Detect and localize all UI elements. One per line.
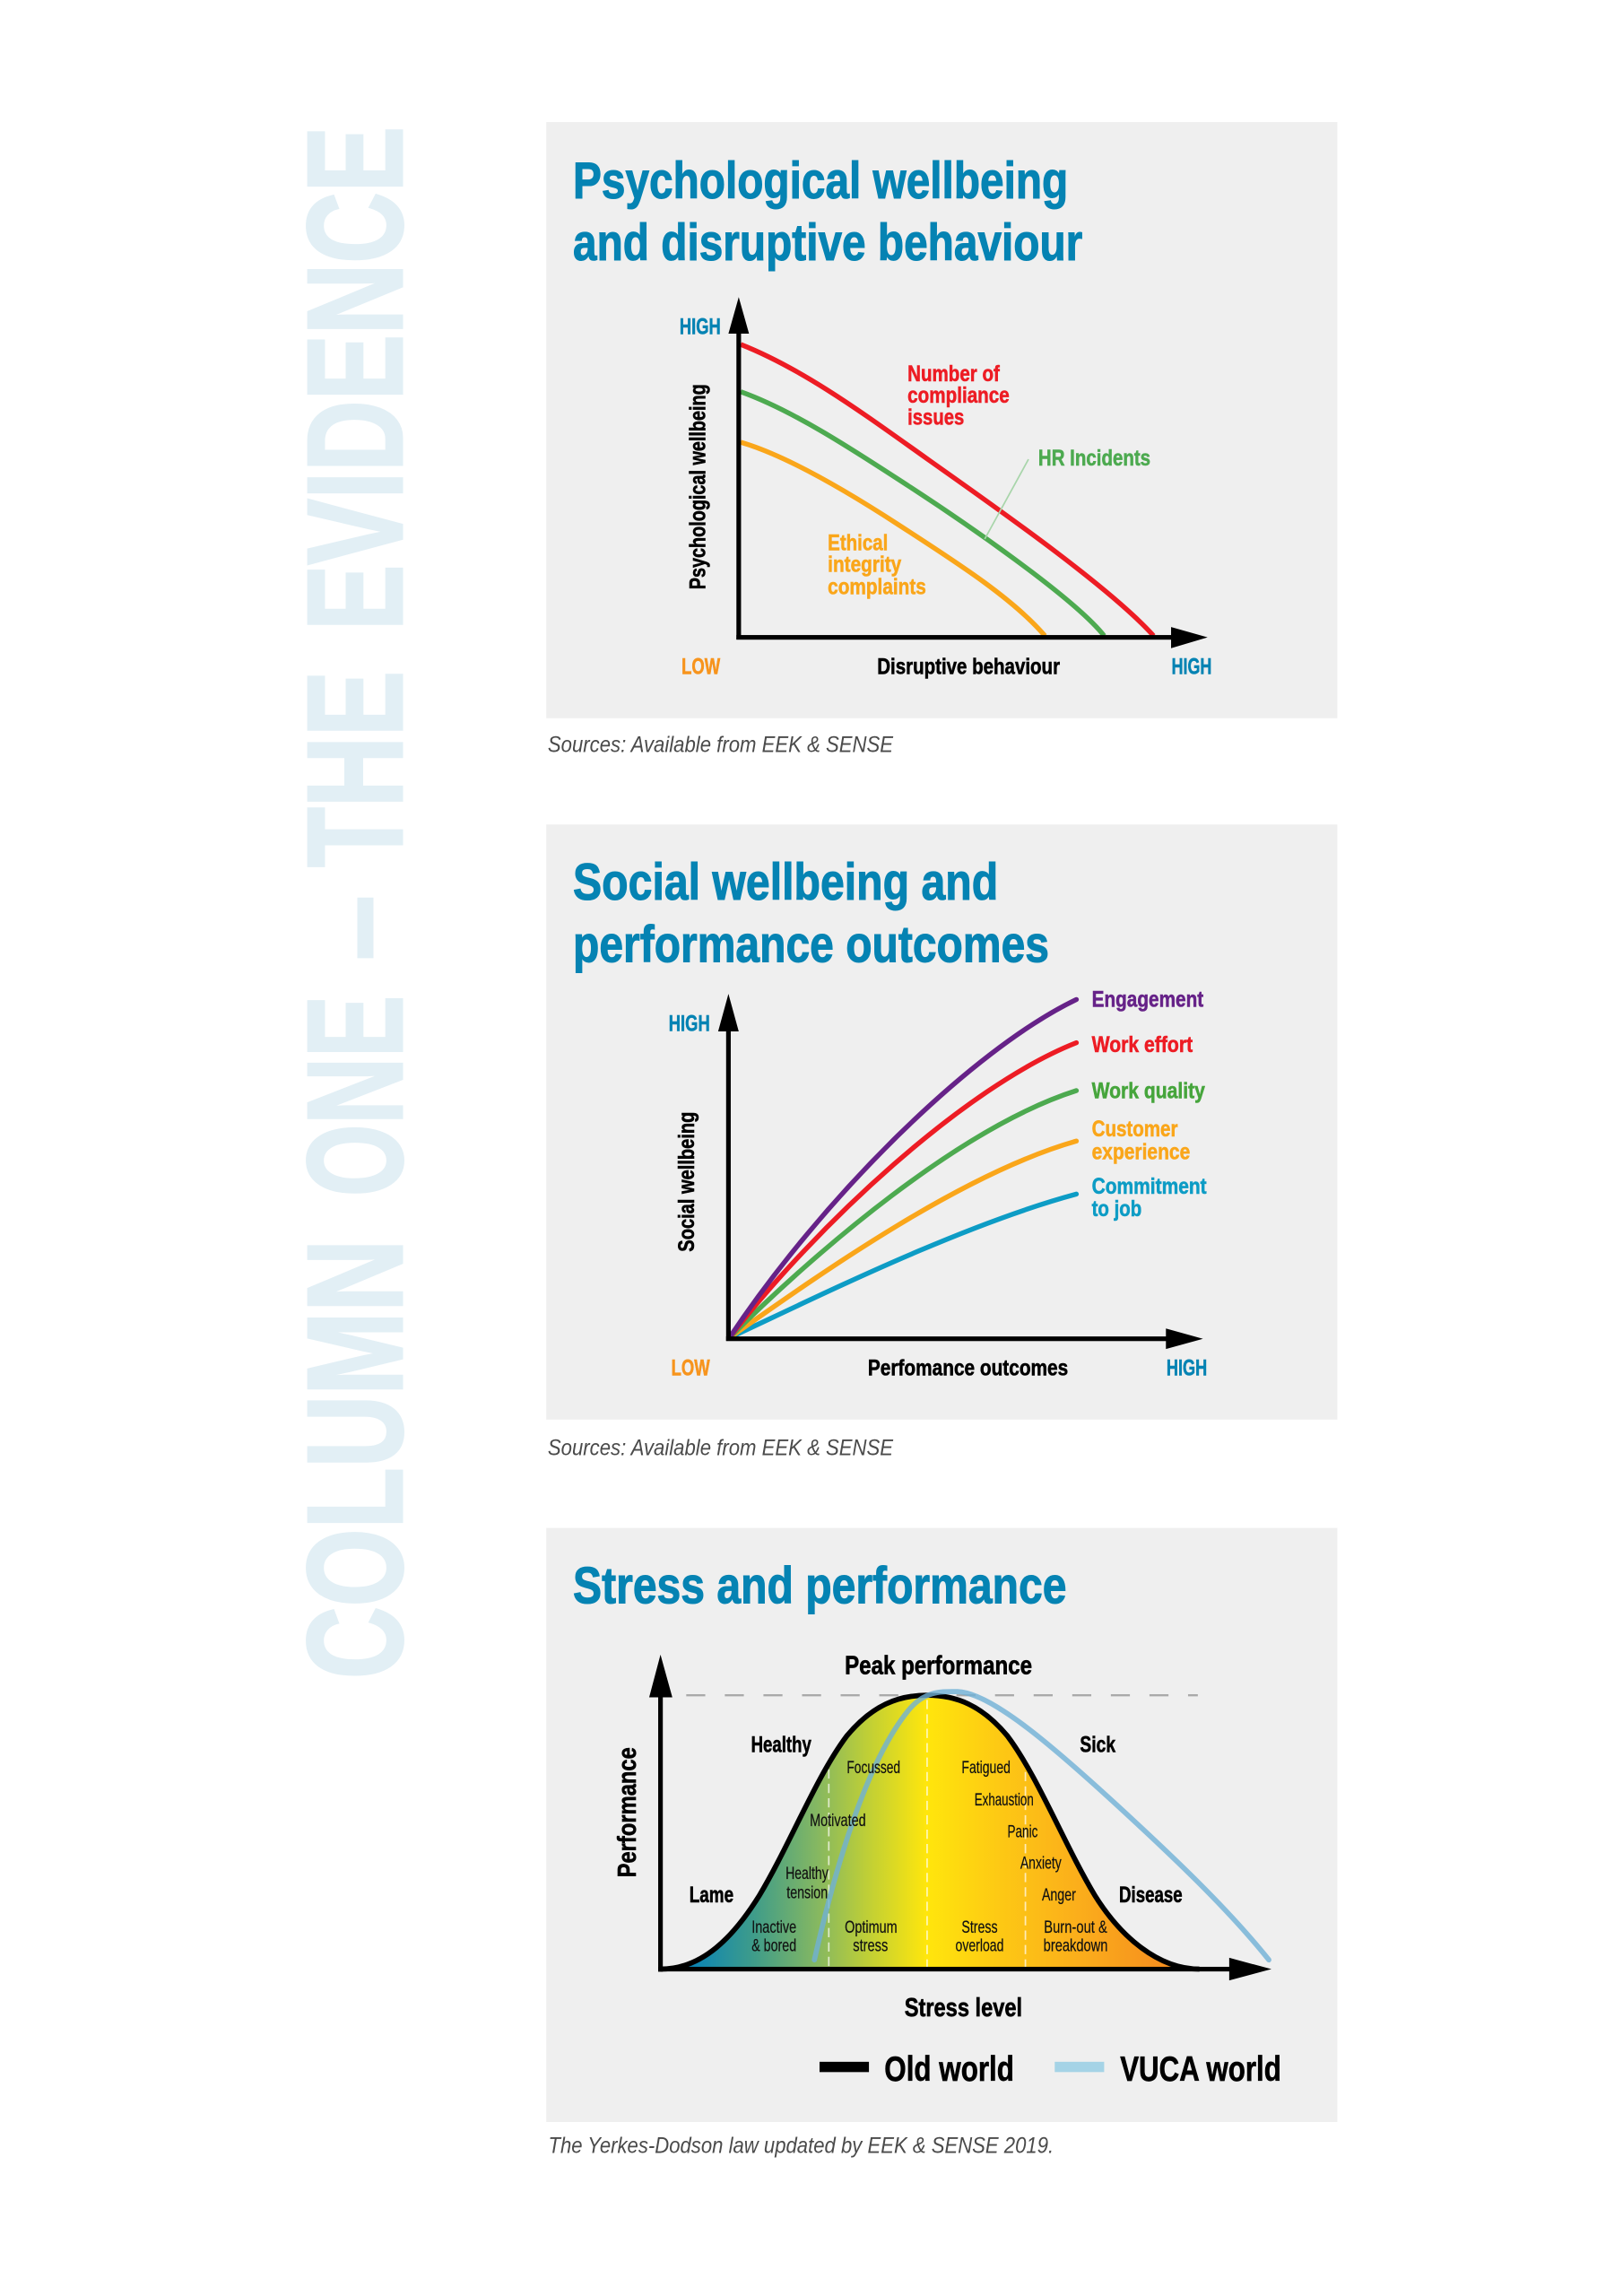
- low label: LOW: [681, 654, 720, 679]
- line chart: wellbeing vs disruptive behaviour: [680, 297, 1211, 679]
- vertical watermark heading: THE: [279, 671, 430, 867]
- zone labels: Sick: [1080, 1732, 1116, 1757]
- stress state labels: Inactive: [751, 1918, 796, 1937]
- stress state labels: Anger: [1042, 1886, 1076, 1905]
- caption: The Yerkes-Dodson law updated by EEK & SENSE 2019.: [548, 2133, 1054, 2158]
- heading: social wellbeing: performance outcomes: [573, 917, 1049, 974]
- low label: LOW: [672, 1355, 710, 1380]
- label: ethical integrity complaints: complaints: [828, 574, 926, 599]
- label: work quality: Work quality: [1092, 1079, 1205, 1104]
- stress state labels: Focussed: [846, 1759, 900, 1778]
- y axis with arrow: [718, 994, 739, 1341]
- legend: VUCA world: [1120, 2050, 1281, 2089]
- stress state labels: overload: [956, 1936, 1003, 1955]
- heading: stress and performance: Stress and performance: [573, 1557, 1066, 1614]
- curve: work quality: [730, 1091, 1076, 1338]
- source note: Sources: Available from EEK & SENSE: [548, 1435, 894, 1460]
- legend: Old world: [884, 2050, 1014, 2089]
- x axis high label: HIGH: [1167, 1355, 1207, 1380]
- curve: HR incidents: [741, 392, 1104, 636]
- stress state labels: Motivated: [810, 1812, 866, 1831]
- heading: social wellbeing: Social wellbeing and: [573, 854, 998, 911]
- label: ethical integrity complaints: Ethical: [828, 531, 888, 556]
- label: compliance issues: issues: [907, 405, 964, 430]
- curve: customer experience: [730, 1141, 1076, 1338]
- stress state labels: stress: [853, 1936, 888, 1955]
- y axis with arrow: [728, 297, 749, 639]
- curve: ethical integrity complaints: [741, 442, 1045, 636]
- stress state labels: Exhaustion: [975, 1791, 1034, 1810]
- y axis high label: HIGH: [680, 315, 721, 340]
- stress state labels: Panic: [1007, 1823, 1037, 1842]
- label: customer experience: Customer: [1092, 1117, 1178, 1142]
- stress state labels: Anxiety: [1020, 1855, 1062, 1874]
- label: compliance issues: [907, 361, 1010, 430]
- y axis high label: HIGH: [669, 1011, 710, 1036]
- zone labels: [690, 1732, 1183, 1908]
- peak performance label: Peak performance: [845, 1652, 1032, 1681]
- old world curve: [661, 1695, 1200, 1970]
- zone labels: Healthy: [751, 1732, 811, 1757]
- y axis title: Performance: [613, 1747, 642, 1877]
- heading: psychological wellbeing: Psychological wellbeing: [573, 152, 1068, 210]
- x axis title: Stress level: [905, 1994, 1022, 2022]
- panel: stress and performance: [546, 1528, 1337, 2158]
- bell curve chart: [613, 1652, 1271, 2022]
- bell gradient fill: [661, 1695, 1200, 1970]
- panel: psychological wellbeing: [546, 122, 1337, 758]
- label: ethical integrity complaints: integrity: [828, 552, 901, 578]
- label: ethical integrity complaints: [828, 531, 926, 599]
- leader line: HR incidents: [985, 459, 1028, 539]
- zone labels: Disease: [1119, 1883, 1183, 1908]
- stress state labels: [751, 1759, 1107, 1955]
- label: customer experience: [1092, 1117, 1190, 1164]
- vertical watermark heading: ONE: [279, 996, 430, 1196]
- x axis high label: HIGH: [1172, 654, 1211, 679]
- x axis with arrow: [726, 1328, 1203, 1349]
- x axis title: Perfomance outcomes: [868, 1355, 1068, 1380]
- label: commitment to job: Commitment: [1092, 1174, 1207, 1199]
- peak dashed line: [686, 1693, 1198, 1697]
- y axis title: Social wellbeing: [674, 1112, 699, 1252]
- stress state labels: Burn-out &: [1044, 1918, 1107, 1937]
- VUCA world curve: [814, 1692, 1269, 1960]
- label: compliance issues: Number of: [907, 361, 1000, 387]
- vertical watermark heading: [279, 126, 430, 1679]
- stress state labels: Optimum: [845, 1918, 898, 1937]
- heading: social wellbeing: [573, 854, 1049, 974]
- heading: psychological wellbeing: and disruptive behaviour: [573, 214, 1082, 272]
- legend: [820, 2050, 1281, 2089]
- stress state labels: tension: [786, 1883, 828, 1902]
- x axis title: Disruptive behaviour: [877, 654, 1060, 679]
- curve: work effort: [730, 1043, 1076, 1338]
- label: commitment to job: to job: [1092, 1196, 1141, 1222]
- curve: engagement: [730, 999, 1076, 1338]
- label: work effort: Work effort: [1092, 1032, 1193, 1057]
- line chart: social wellbeing vs performance: [669, 987, 1207, 1380]
- source note: Sources: Available from EEK & SENSE: [548, 733, 894, 758]
- y axis with arrow: [649, 1655, 672, 1971]
- stress state labels: & bored: [751, 1936, 796, 1955]
- y axis title: Psychological wellbeing: [686, 384, 711, 589]
- label: HR incidents: HR Incidents: [1038, 446, 1150, 471]
- stress state labels: Fatigued: [961, 1759, 1011, 1778]
- label: compliance issues: compliance: [907, 383, 1010, 408]
- curve: commitment to job: [730, 1194, 1076, 1338]
- x axis with arrow: [736, 627, 1208, 648]
- heading: psychological wellbeing: [573, 152, 1082, 272]
- zone divider dashes: [829, 1700, 1026, 1968]
- label: customer experience: experience: [1092, 1139, 1190, 1164]
- vertical watermark heading: –: [279, 895, 430, 961]
- panel: social wellbeing: [546, 824, 1337, 1460]
- stress state labels: Stress: [961, 1918, 998, 1937]
- curve: compliance issues: [741, 344, 1154, 636]
- stress state labels: Healthy: [785, 1865, 829, 1883]
- label: commitment to job: [1092, 1174, 1207, 1222]
- vertical watermark heading: COLUMN: [279, 1239, 430, 1679]
- stress state labels: breakdown: [1044, 1936, 1107, 1955]
- label: engagement: Engagement: [1092, 987, 1204, 1012]
- x axis with arrow: [658, 1958, 1271, 1980]
- zone labels: Lame: [690, 1883, 733, 1908]
